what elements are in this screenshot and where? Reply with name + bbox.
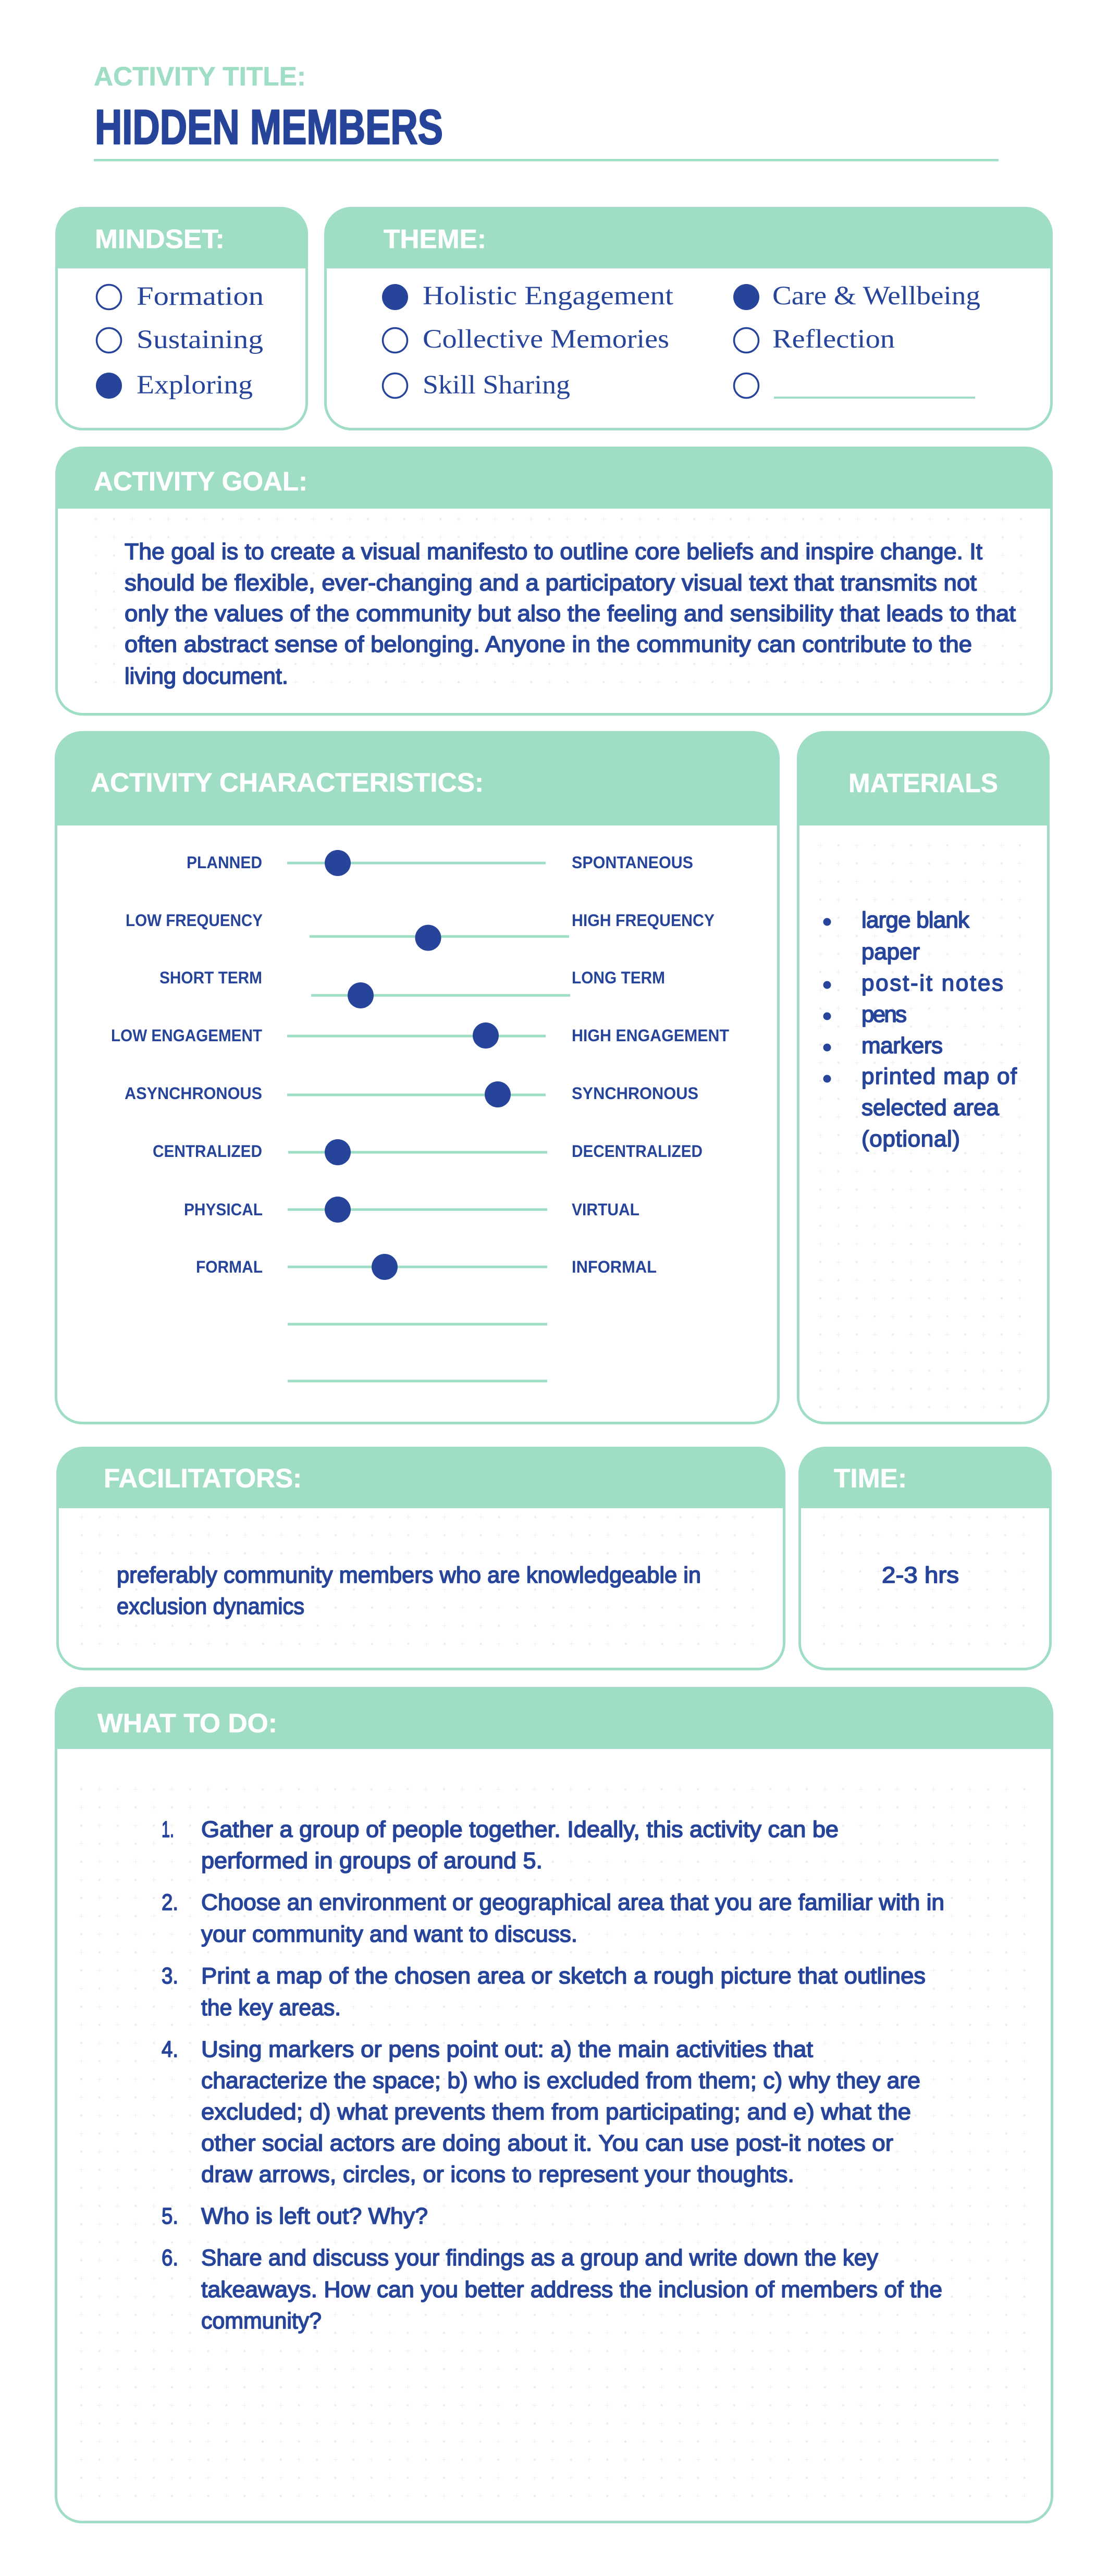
slider: centralized to decentralized: CENTRALIZED xyxy=(153,1142,262,1161)
step 3 xyxy=(162,1963,926,2020)
slider: centralized to decentralized: DECENTRALIZED xyxy=(572,1142,703,1161)
text: goal description xyxy=(125,539,1016,689)
step 4: 4. xyxy=(162,2037,178,2062)
slider: planned to spontaneous: PLANNED xyxy=(187,853,262,872)
option: blank xyxy=(734,373,975,399)
option: exploring xyxy=(96,371,253,400)
list: materials: selected area xyxy=(861,1095,1000,1120)
list: materials: paper xyxy=(861,939,920,965)
list: materials: printed map of xyxy=(861,1064,1017,1089)
option: reflection xyxy=(734,325,895,354)
option: reflection: Reflection xyxy=(772,325,895,354)
list: steps xyxy=(162,1817,944,2334)
step 4: excluded; d) what prevents them from participating; and e) what the xyxy=(201,2099,911,2125)
option: exploring: Exploring xyxy=(137,371,253,400)
step 3: 3. xyxy=(162,1963,178,1989)
list: materials: large blank xyxy=(861,907,970,933)
option: formation: Formation xyxy=(137,282,264,311)
step 6: community? xyxy=(201,2308,322,2334)
slider: physical to virtual: VIRTUAL xyxy=(572,1200,639,1219)
text: goal description: often abstract sense of belonging. Anyone in the community can contribute to the xyxy=(125,632,972,657)
step 1: performed in groups of around 5. xyxy=(201,1848,543,1874)
list: materials: (optional) xyxy=(861,1126,960,1152)
step 2: Choose an environment or geographical area that you are familiar with in xyxy=(201,1890,944,1915)
panel: time xyxy=(798,1447,1052,1669)
slider: asynchronous to synchronous: SYNCHRONOUS xyxy=(572,1084,698,1103)
step 5: Who is left out? Why? xyxy=(201,2203,428,2229)
list: materials: markers xyxy=(861,1033,943,1058)
slider: formal to informal: INFORMAL xyxy=(572,1258,657,1276)
slider: low to high engagement: LOW ENGAGEMENT xyxy=(111,1026,262,1045)
step 4: characterize the space; b) who is excluded from them; c) why they are xyxy=(201,2068,920,2093)
option: collective memories: Collective Memories xyxy=(423,325,669,354)
step 5: 5. xyxy=(162,2203,178,2229)
title: HIDDEN MEMBERS xyxy=(95,100,443,154)
heading: theme: THEME: xyxy=(384,224,486,254)
step 3: the key areas. xyxy=(201,1995,341,2020)
slider: low to high engagement: HIGH ENGAGEMENT xyxy=(572,1026,729,1045)
slider: formal to informal xyxy=(196,1254,657,1280)
list: materials: post-it notes xyxy=(861,970,1003,996)
heading: facilitators: FACILITATORS: xyxy=(104,1463,302,1493)
activity title label: ACTIVITY TITLE: xyxy=(94,61,306,91)
slider: asynchronous to synchronous xyxy=(125,1081,698,1107)
list: materials: pens xyxy=(861,1002,907,1027)
slider: short to long term: LONG TERM xyxy=(572,968,665,987)
slider: formal to informal: FORMAL xyxy=(196,1258,263,1276)
slider: planned to spontaneous xyxy=(187,850,693,876)
option: holistic engagement: Holistic Engagement xyxy=(423,281,673,311)
slider: asynchronous to synchronous: ASYNCHRONOUS xyxy=(125,1084,262,1103)
step 1 xyxy=(162,1817,839,1874)
slider: low to high engagement xyxy=(111,1022,729,1049)
step 2 xyxy=(162,1890,944,1947)
step 4 xyxy=(162,2037,920,2187)
step 2: your community and want to discuss. xyxy=(201,1921,577,1947)
option: skill sharing: Skill Sharing xyxy=(423,371,570,400)
panel: materials xyxy=(797,731,1050,1423)
step 6: 6. xyxy=(162,2245,178,2271)
slider: short to long term xyxy=(159,968,665,1008)
heading: mindset: MINDSET: xyxy=(95,224,225,254)
step 6 xyxy=(162,2245,942,2334)
slider: low to high frequency xyxy=(126,911,715,951)
text: goal description: living document. xyxy=(125,663,288,689)
step 4: draw arrows, circles, or icons to represent your thoughts. xyxy=(201,2162,794,2187)
step 4: other social actors are doing about it. You can use post-it notes or xyxy=(201,2130,893,2156)
option: sustaining: Sustaining xyxy=(137,325,263,354)
text: goal description: should be flexible, ever-changing and a participatory visual text that transmits not xyxy=(125,570,977,596)
panel: what to do xyxy=(55,1687,1053,2522)
option: sustaining xyxy=(97,325,263,354)
slider: planned to spontaneous: SPONTANEOUS xyxy=(572,853,693,872)
text: duration: 2-3 hrs xyxy=(882,1562,959,1588)
slider: low to high frequency: HIGH FREQUENCY xyxy=(572,911,715,930)
slider: physical to virtual xyxy=(184,1197,639,1223)
step 4: Using markers or pens point out: a) the main activities that xyxy=(201,2037,813,2062)
slider: centralized to decentralized xyxy=(153,1139,703,1165)
step 2: 2. xyxy=(162,1890,178,1915)
slider: physical to virtual: PHYSICAL xyxy=(184,1200,263,1219)
list: materials xyxy=(823,907,1017,1152)
text: facilitators description xyxy=(117,1562,701,1619)
text: goal description: only the values of the community but also the feeling and sensibility that leads to that xyxy=(125,601,1016,626)
slider: low to high frequency: LOW FREQUENCY xyxy=(126,911,263,930)
panel: facilitators xyxy=(56,1447,785,1669)
heading: what to do: WHAT TO DO: xyxy=(97,1708,277,1738)
option: care and wellbeing: Care & Wellbeing xyxy=(772,281,980,311)
step 1: 1. xyxy=(162,1817,174,1842)
text: facilitators description: preferably community members who are knowledgeable in xyxy=(117,1562,701,1588)
text: goal description: The goal is to create a visual manifesto to outline core beliefs and inspire change. It xyxy=(125,539,982,564)
heading: activity characteristics: ACTIVITY CHARACTERISTICS: xyxy=(91,768,484,797)
heading: activity goal: ACTIVITY GOAL: xyxy=(94,466,307,496)
panel: mindset xyxy=(55,207,308,429)
text: facilitators description: exclusion dynamics xyxy=(117,1594,304,1619)
heading: time: TIME: xyxy=(834,1463,907,1493)
step 6: takeaways. How can you better address the inclusion of members of the xyxy=(201,2277,942,2302)
panel: theme xyxy=(324,207,1053,429)
heading: materials: MATERIALS xyxy=(848,768,998,798)
step 1: Gather a group of people together. Ideally, this activity can be xyxy=(201,1817,839,1842)
panel: activity characteristics xyxy=(55,731,780,1423)
slider: short to long term: SHORT TERM xyxy=(159,968,262,987)
option: formation xyxy=(97,282,264,311)
step 6: Share and discuss your findings as a group and write down the key xyxy=(201,2245,878,2271)
step 3: Print a map of the chosen area or sketch a rough picture that outlines xyxy=(201,1963,926,1989)
panel: activity goal xyxy=(55,447,1053,714)
